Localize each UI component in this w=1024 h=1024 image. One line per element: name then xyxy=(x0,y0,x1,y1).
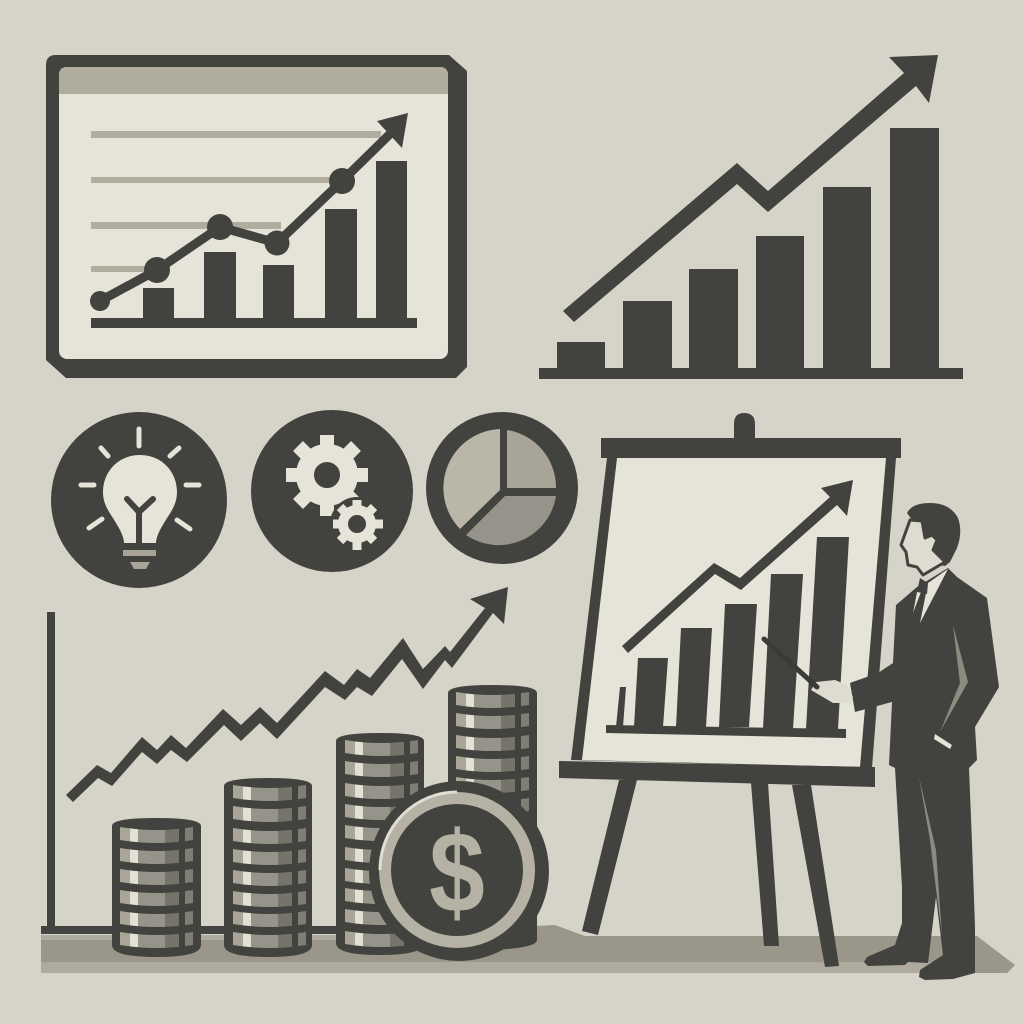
icon: gears xyxy=(251,410,413,572)
coin stack 3 xyxy=(336,733,424,955)
chart: large bars with rising arrow xyxy=(539,55,963,379)
pie slice: bottom right xyxy=(466,496,556,545)
presenter figure xyxy=(764,503,999,980)
small gear xyxy=(330,497,384,551)
board chart arrow xyxy=(622,480,853,653)
rising arrow xyxy=(563,55,938,322)
jacket highlight xyxy=(940,625,968,732)
filament xyxy=(127,499,153,543)
pie slice: left xyxy=(443,429,500,529)
grid lines xyxy=(91,131,381,272)
board chart bars xyxy=(606,537,849,738)
pointer xyxy=(764,639,817,687)
easel top bar and knob xyxy=(734,413,755,440)
board frame xyxy=(571,458,896,768)
window screen xyxy=(59,67,448,359)
icon: light bulb xyxy=(51,412,227,588)
easel legs xyxy=(582,780,839,967)
icon: pie chart xyxy=(426,412,578,564)
pie slice: top right xyxy=(507,430,556,488)
panel: dashboard window with chart xyxy=(46,55,467,378)
icon: dollar coin xyxy=(369,781,549,961)
coin stack 4 xyxy=(448,685,537,950)
window header band xyxy=(59,67,448,94)
trouser crease xyxy=(919,777,942,935)
suit and legs xyxy=(850,568,999,980)
hair xyxy=(907,503,960,566)
chart: zigzag growth line with axis xyxy=(41,587,508,934)
hand xyxy=(811,680,853,703)
board surface xyxy=(582,458,886,767)
bulb glass xyxy=(103,455,177,543)
icon: dollar coin: $ xyxy=(429,807,485,937)
bow tie xyxy=(917,578,928,594)
face xyxy=(901,520,945,575)
bulb base xyxy=(123,550,156,556)
large gear xyxy=(286,435,368,516)
coin stack 2 xyxy=(224,778,312,957)
pocket square xyxy=(934,734,952,749)
bar chart xyxy=(91,161,417,328)
trend line with nodes and arrow xyxy=(90,113,408,311)
easel with presentation board xyxy=(559,413,901,967)
easel bottom ledge xyxy=(559,761,875,787)
coin stack 1 xyxy=(112,818,201,957)
light rays xyxy=(81,429,199,529)
shirt collar xyxy=(920,569,948,623)
ground shadow xyxy=(41,925,1015,973)
